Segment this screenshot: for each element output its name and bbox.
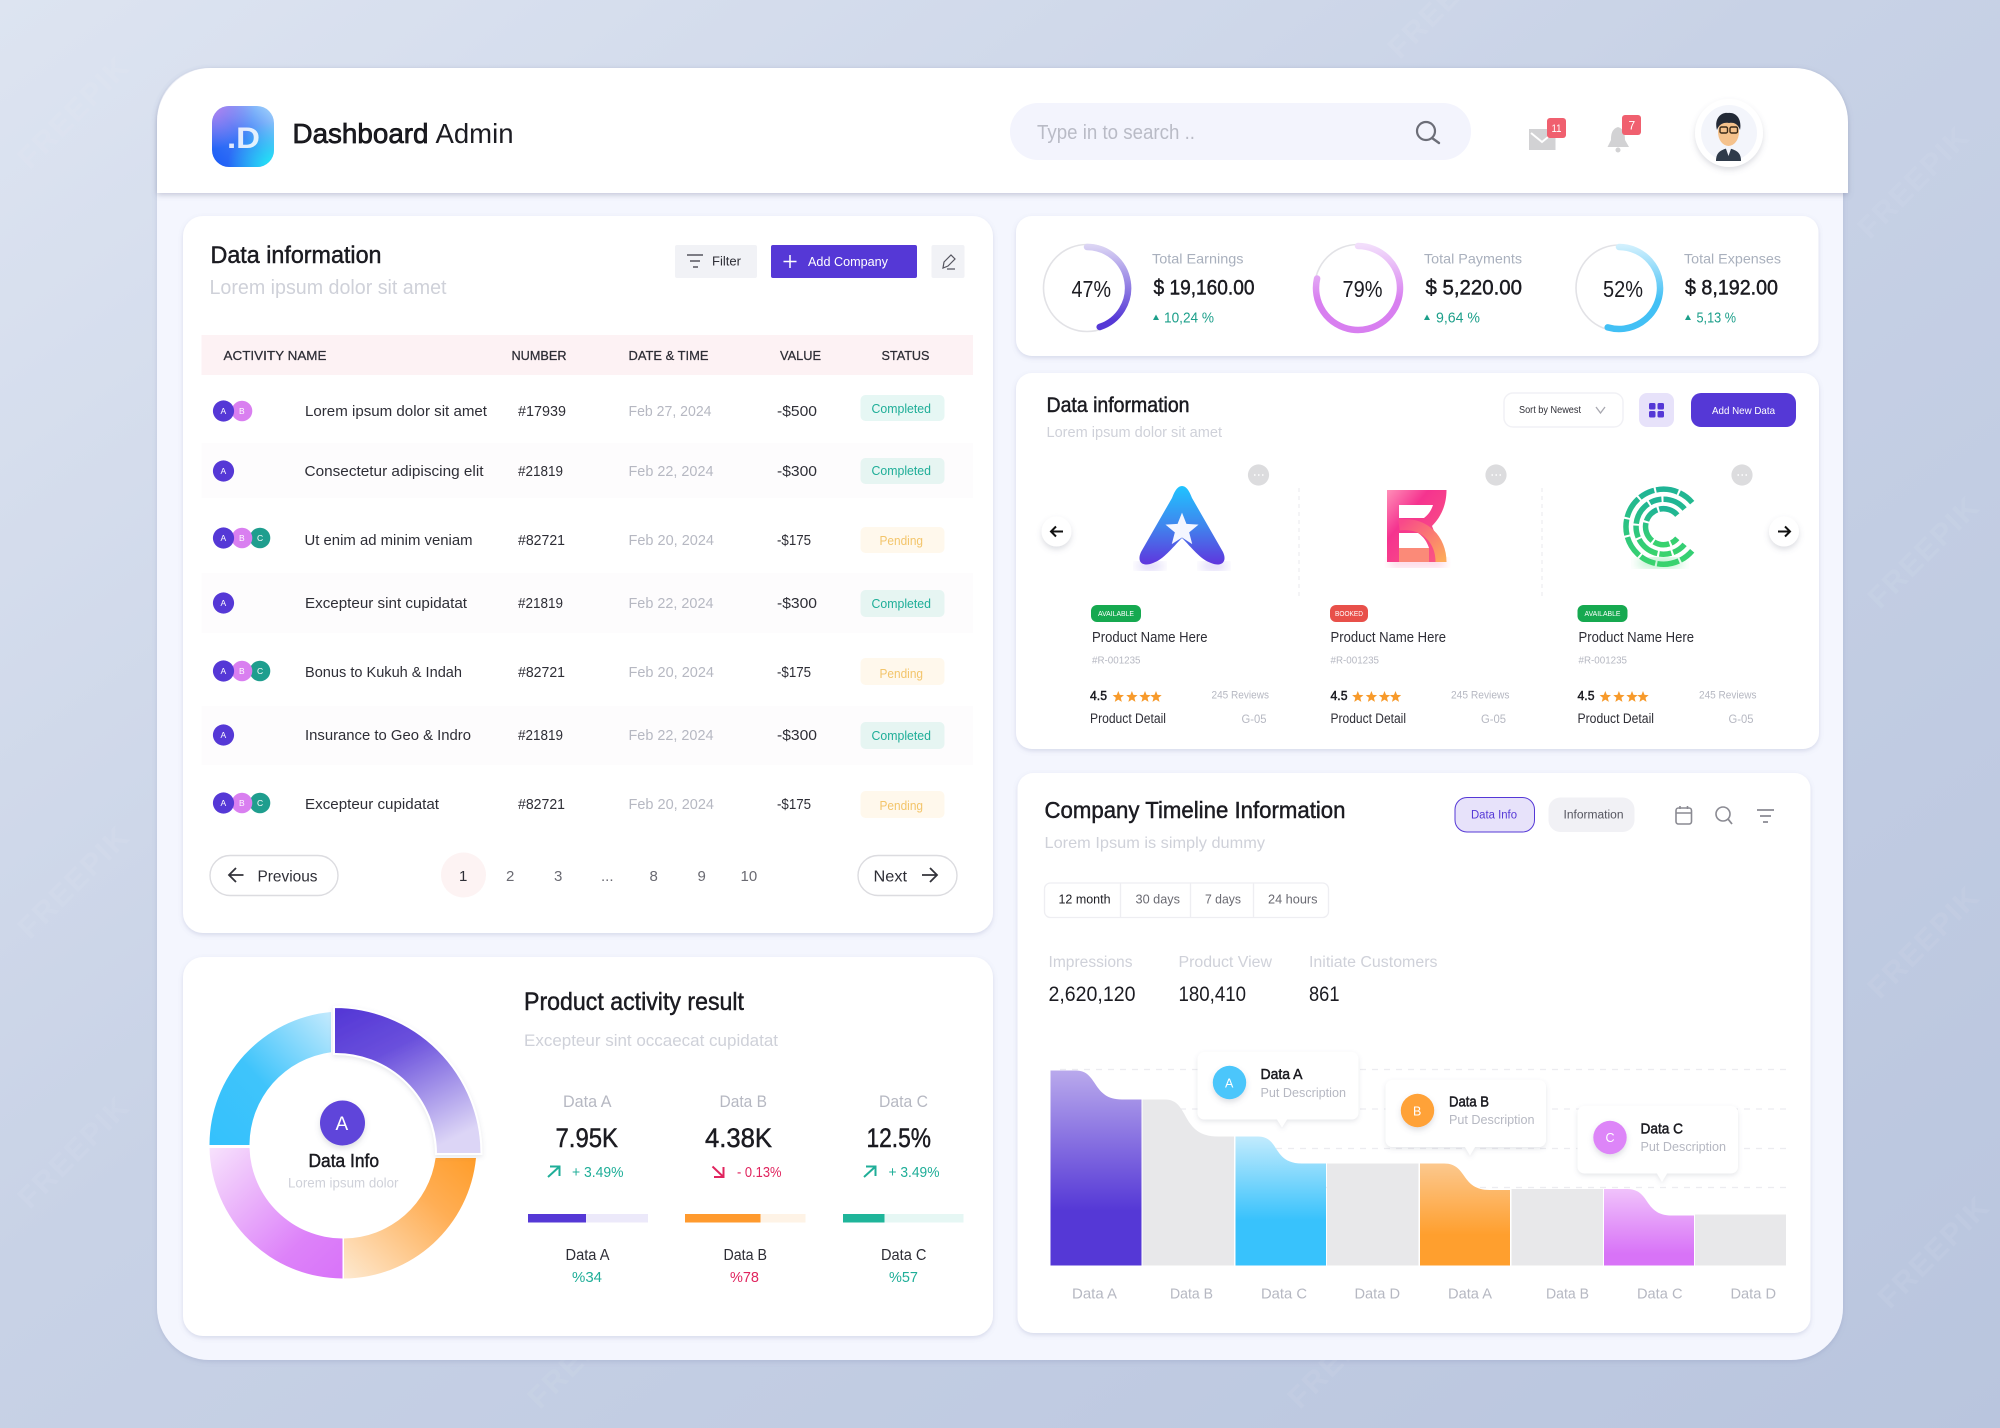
- table row 5: Feb 20, 2024: [628, 665, 714, 681]
- add new data button: Add New Data: [1712, 405, 1775, 417]
- more button: [1731, 464, 1753, 486]
- main dashboard panel: [157, 68, 1843, 1360]
- x axis labels: Data D: [1354, 1286, 1400, 1302]
- table row 4: Completed: [872, 597, 931, 611]
- metric: data B: %78: [730, 1269, 759, 1286]
- more button: [1485, 464, 1507, 486]
- stat: total expenses: [1576, 245, 1781, 331]
- bar 8: [1695, 1214, 1786, 1266]
- grid view button: [1639, 393, 1674, 427]
- table row 1: #17939: [518, 404, 566, 420]
- metric: data A: + 3.49%: [572, 1165, 624, 1181]
- step bar chart: [1050, 1052, 1786, 1302]
- metric: data C: %57: [889, 1269, 918, 1286]
- product card A: #R-001235: [1092, 656, 1141, 666]
- stat: total earnings: $ 19,160.00: [1154, 276, 1254, 300]
- add new data button: [1691, 393, 1796, 427]
- product card A: 245 Reviews: [1212, 690, 1269, 702]
- icon: bell with badge: 7: [1628, 118, 1636, 132]
- product card C: 4.5: [1578, 688, 1594, 703]
- table header: VALUE: [780, 348, 821, 363]
- heading: Product activity result: [524, 988, 744, 1016]
- product card A: G-05: [1242, 712, 1267, 726]
- x axis labels: Data D: [1730, 1286, 1776, 1302]
- table row 2: -$300: [777, 464, 817, 480]
- metric: data C: 12.5%: [866, 1123, 931, 1153]
- rating stars: [1352, 691, 1401, 702]
- donut center label: Data Info: [308, 1151, 379, 1171]
- status badge: BOOKED: [1335, 609, 1364, 618]
- table row 2: Consectetur adipiscing elit: [304, 464, 484, 480]
- donut center label: Lorem ipsum dolor: [288, 1176, 399, 1190]
- metric: data C: Data C: [881, 1247, 926, 1264]
- table row 6: Feb 22, 2024: [628, 728, 714, 744]
- status badge: AVAILABLE: [1098, 609, 1134, 618]
- stat: total payments: [1314, 244, 1522, 332]
- stat: total payments: $ 5,220.00: [1426, 276, 1522, 300]
- stat: impressions: 2,620,120: [1048, 983, 1136, 1006]
- watermark: FREEPIK: [1872, 1190, 1997, 1315]
- icon: calendar: [1676, 806, 1692, 824]
- table row 2: Completed: [872, 464, 931, 478]
- table row 6: -$300: [777, 728, 817, 744]
- table row 6: [202, 706, 973, 765]
- stat: total earnings: 47%: [1072, 276, 1111, 302]
- bar 3: [1236, 1136, 1326, 1266]
- logo C: [1626, 489, 1692, 568]
- stat: total earnings: [1044, 244, 1254, 332]
- previous button: [210, 856, 338, 896]
- subheading: Lorem ipsum dolor sit amet: [210, 277, 447, 299]
- donut center label: A: [336, 1114, 348, 1135]
- table row 3: Ut enim ad minim veniam: [304, 533, 472, 549]
- title: [292, 118, 514, 149]
- sort dropdown: Sort by Newest: [1519, 405, 1581, 416]
- time range tabs: 7 days: [1205, 892, 1241, 906]
- heading: Data information: [210, 242, 382, 269]
- metric: data A: %34: [572, 1269, 602, 1286]
- table header: DATE & TIME: [628, 348, 709, 363]
- x axis labels: Data A: [1448, 1286, 1492, 1302]
- product card C: G-05: [1728, 712, 1754, 726]
- data info tab: [1455, 798, 1534, 832]
- table row 5: -$175: [777, 665, 811, 681]
- table row 2: [202, 443, 973, 498]
- pagination: 8: [650, 868, 658, 885]
- stat: total payments: 9,64 %: [1436, 310, 1480, 326]
- product card A: 4.5: [1090, 688, 1107, 703]
- table row 4: A: [220, 598, 226, 608]
- stat: impressions: Impressions: [1048, 954, 1133, 971]
- table row 3: [213, 527, 944, 553]
- sort dropdown: [1504, 393, 1623, 427]
- logo B: [1387, 490, 1446, 567]
- filter button: [675, 245, 757, 278]
- add company button: [771, 245, 917, 278]
- data info tab: Data Info: [1471, 810, 1517, 822]
- stat: product view: [1178, 954, 1273, 1006]
- product card A: [1090, 464, 1269, 726]
- metric: data A: Data A: [566, 1247, 610, 1264]
- edit button: [932, 245, 964, 278]
- heading: Company Timeline Information: [1044, 797, 1346, 823]
- metric: data C: Data C: [879, 1092, 928, 1111]
- watermark: FREEPIK: [522, 1290, 647, 1415]
- stat: total earnings: Total Earnings: [1152, 250, 1244, 266]
- add company button: Add Company: [808, 254, 888, 269]
- previous button: Previous: [258, 868, 318, 886]
- table row 3: Feb 20, 2024: [628, 533, 714, 549]
- x axis labels: [1072, 1286, 1776, 1302]
- metric: data C: [843, 1092, 964, 1286]
- product card B: 4.5: [1330, 688, 1348, 703]
- table row 3: A: [220, 533, 226, 543]
- table row 4: Excepteur sint cupidatat: [305, 596, 467, 612]
- status badge: [1091, 605, 1141, 622]
- metric: data A: [528, 1092, 648, 1286]
- product card B: Product Name Here: [1330, 630, 1446, 646]
- stat: initiate customers: Initiate Customers: [1309, 954, 1438, 971]
- watermark: FREEPIK: [12, 1090, 137, 1215]
- next button: Next: [874, 868, 908, 886]
- callout: data C: [1577, 1106, 1738, 1182]
- panel: data information table: [183, 216, 993, 933]
- product card B: 245 Reviews: [1451, 690, 1510, 702]
- information tab: Information: [1564, 810, 1624, 822]
- pagination: ...: [601, 868, 614, 885]
- pagination: 10: [740, 868, 757, 885]
- stat: total expenses: $ 8,192.00: [1685, 276, 1778, 300]
- logo: [212, 106, 274, 167]
- x axis labels: Data C: [1637, 1286, 1683, 1302]
- product card B: Product Detail: [1330, 711, 1406, 726]
- pagination: 9: [698, 868, 706, 885]
- metric: data B: [685, 1092, 806, 1286]
- logo A: [1136, 486, 1228, 570]
- table header: STATUS: [882, 348, 930, 363]
- callout: data A: [1197, 1052, 1359, 1128]
- table row 3: -$175: [777, 533, 811, 549]
- icon: bell with badge: [1608, 115, 1641, 152]
- donut center label: [288, 1100, 399, 1190]
- logo: .D: [227, 122, 260, 155]
- callout: data A: Put Description: [1260, 1086, 1346, 1100]
- table row 1: Completed: [872, 402, 931, 416]
- table row 3: Pending: [880, 534, 923, 548]
- product card B: #R-001235: [1330, 656, 1379, 666]
- product card C: #R-001235: [1578, 656, 1627, 666]
- table row 5: C: [257, 666, 263, 676]
- watermark: FREEPIK: [1852, 120, 1977, 245]
- stat: product view: Product View: [1178, 954, 1273, 971]
- time range tabs: [1044, 883, 1328, 918]
- watermark: FREEPIK: [12, 820, 137, 945]
- stat: impressions: [1048, 954, 1136, 1006]
- bar 7: [1604, 1189, 1694, 1266]
- callout: data B: B: [1413, 1104, 1421, 1118]
- stat: total earnings: 10,24 %: [1164, 310, 1214, 326]
- table header: NUMBER: [512, 348, 566, 363]
- table row 3: #82721: [518, 533, 565, 549]
- callout: data B: Data B: [1449, 1094, 1489, 1110]
- subheading: Lorem Ipsum is simply dummy: [1044, 835, 1265, 852]
- bar 4: [1327, 1164, 1418, 1266]
- table row 7: #82721: [518, 797, 565, 813]
- table header: [202, 335, 973, 375]
- metric: data B: Data B: [720, 1092, 767, 1111]
- table row 1: A: [220, 406, 226, 416]
- watermark: FREEPIK: [1282, 1290, 1407, 1415]
- stat: product view: 180,410: [1178, 983, 1246, 1006]
- search box: [1010, 103, 1471, 160]
- table row 5: Bonus to Kukuh & Indah: [305, 665, 462, 681]
- header bar: [157, 68, 1848, 193]
- table row 7: A: [220, 798, 226, 808]
- table row 6: Completed: [872, 729, 931, 743]
- product card C: 245 Reviews: [1699, 690, 1757, 702]
- table row 7: Feb 20, 2024: [628, 797, 714, 813]
- table row 1: [213, 395, 944, 422]
- callout: data C: Data C: [1640, 1122, 1683, 1138]
- watermark: FREEPIK: [1862, 490, 1987, 615]
- table row 1: -$500: [777, 404, 817, 420]
- callout: data A: A: [1225, 1076, 1234, 1090]
- callout: data B: Put Description: [1449, 1113, 1535, 1127]
- avatar: [1695, 99, 1763, 167]
- bar 1: [1050, 1070, 1142, 1266]
- product card B: G-05: [1481, 712, 1506, 726]
- table row 5: [213, 658, 944, 685]
- product card A: Product Name Here: [1092, 630, 1208, 646]
- table row 1: Feb 27, 2024: [628, 404, 712, 420]
- panel: totals summary: [1016, 216, 1818, 356]
- rating stars: [1600, 691, 1649, 702]
- status badge: [1578, 605, 1628, 622]
- table row 6: #21819: [518, 728, 563, 744]
- time range tabs: 24 hours: [1268, 892, 1318, 906]
- metric: data A: 7.95K: [556, 1123, 618, 1153]
- table row 3: B: [239, 533, 245, 543]
- bar 6: [1512, 1189, 1603, 1266]
- watermark: FREEPIK: [1862, 880, 1987, 1005]
- table header: ACTIVITY NAME: [224, 348, 327, 363]
- icon: filter: [1757, 810, 1774, 822]
- pagination: 1: [459, 868, 467, 885]
- bar 5: [1420, 1164, 1510, 1266]
- stat: total expenses: Total Expenses: [1684, 250, 1781, 266]
- product card A: Product Detail: [1090, 711, 1166, 726]
- stat: initiate customers: [1309, 954, 1438, 1006]
- table row 7: C: [257, 798, 263, 808]
- stat: total payments: Total Payments: [1424, 250, 1522, 266]
- table row 5: A: [220, 666, 226, 676]
- information tab: [1548, 798, 1634, 832]
- table row 7: B: [239, 798, 245, 808]
- table row 7: -$175: [777, 797, 811, 813]
- x axis labels: Data B: [1546, 1286, 1589, 1302]
- more button: [1248, 464, 1269, 486]
- table row 5: B: [239, 666, 245, 676]
- donut chart: [210, 1007, 482, 1278]
- icon: mail with badge: 11: [1552, 123, 1562, 135]
- icon: mail with badge: [1529, 118, 1566, 150]
- table row 5: #82721: [518, 665, 565, 681]
- x axis labels: Data A: [1072, 1286, 1117, 1302]
- table row 6: A: [220, 730, 226, 740]
- stat: initiate customers: 861: [1309, 983, 1340, 1006]
- table row 2: Feb 22, 2024: [628, 464, 714, 480]
- table row 4: Feb 22, 2024: [628, 596, 714, 612]
- x axis labels: Data B: [1170, 1286, 1213, 1302]
- product card C: Product Name Here: [1578, 630, 1694, 646]
- metric: data C: + 3.49%: [888, 1165, 940, 1181]
- title: Dashboard: [292, 118, 428, 149]
- rating stars: [1113, 691, 1162, 702]
- table row 3: C: [257, 533, 263, 543]
- title: Admin: [436, 118, 514, 149]
- x axis labels: Data C: [1261, 1286, 1307, 1302]
- table row 2: #21819: [518, 464, 563, 480]
- status badge: AVAILABLE: [1584, 609, 1620, 618]
- table row 7: Pending: [880, 799, 923, 813]
- icon: search: [1716, 807, 1732, 824]
- subheading: Lorem ipsum dolor sit amet: [1046, 424, 1223, 441]
- stat: total expenses: 52%: [1603, 276, 1643, 302]
- table row 2: A: [220, 466, 226, 476]
- table row 7: Excepteur cupidatat: [305, 797, 439, 813]
- subheading: Excepteur sint occaecat cupidatat: [524, 1031, 778, 1050]
- callout: data C: Put Description: [1640, 1140, 1726, 1154]
- table row 1: B: [239, 406, 245, 416]
- search box: Type in to search ..: [1037, 122, 1195, 144]
- panel: company timeline: [1018, 773, 1810, 1333]
- watermark: FREEPIK: [12, 50, 137, 175]
- product card C: [1578, 464, 1757, 726]
- bar 2: [1142, 1100, 1234, 1266]
- metric: data B: Data B: [724, 1247, 767, 1264]
- table row 6: Insurance to Geo & Indro: [305, 728, 471, 744]
- stat: total payments: 79%: [1342, 276, 1382, 302]
- table row 4: #21819: [518, 596, 563, 612]
- filter button: Filter: [712, 254, 742, 268]
- pagination: [441, 852, 757, 898]
- metric: data B: - 0.13%: [737, 1165, 782, 1181]
- table row 5: Pending: [880, 667, 923, 681]
- heading: Data information: [1046, 394, 1190, 417]
- table row 1: Lorem ipsum dolor sit amet: [305, 404, 487, 420]
- product card B: [1330, 464, 1510, 726]
- time range tabs: 30 days: [1136, 892, 1180, 906]
- table row 4: [202, 573, 973, 633]
- next button: [858, 856, 957, 896]
- table row 7: [213, 791, 944, 818]
- previous arrow: [1042, 516, 1072, 546]
- next arrow: [1769, 516, 1799, 546]
- callout: data C: C: [1606, 1131, 1615, 1145]
- pagination: 3: [554, 868, 562, 885]
- status badge: [1330, 605, 1368, 622]
- callout: data A: Data A: [1260, 1067, 1303, 1083]
- table row 4: -$300: [777, 596, 817, 612]
- metric: data A: Data A: [563, 1092, 612, 1111]
- product card C: Product Detail: [1578, 711, 1654, 726]
- panel: product activity result: [183, 957, 993, 1336]
- callout: data B: [1386, 1080, 1546, 1156]
- metric: data B: 4.38K: [705, 1123, 772, 1153]
- panel: product gallery: [1016, 373, 1819, 749]
- stat: total expenses: 5,13 %: [1696, 310, 1736, 326]
- pagination: 2: [506, 868, 514, 885]
- time range tabs: 12 month: [1058, 892, 1110, 906]
